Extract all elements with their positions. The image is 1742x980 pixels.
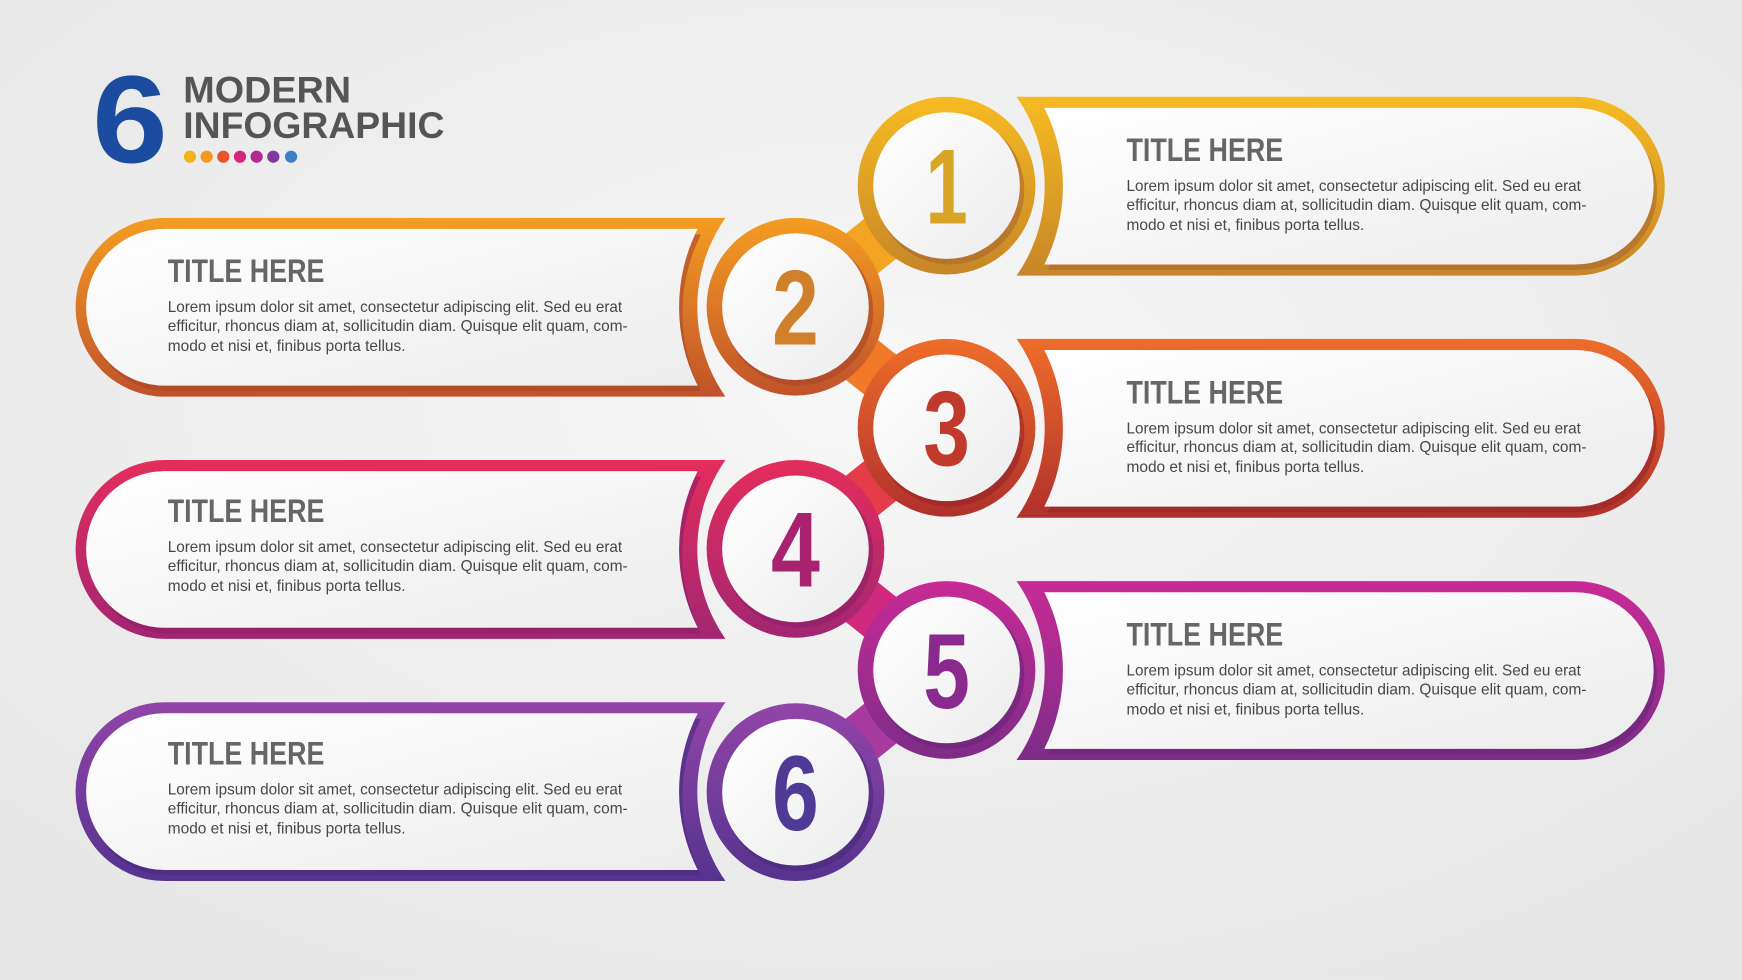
body 6 — [168, 781, 628, 837]
body 5 — [1127, 663, 1586, 718]
body 2 — [168, 299, 628, 355]
number 4: 4 — [771, 490, 820, 610]
body 5: efficitur, rhoncus diam at, sollicitudin diam. Quisque elit quam, com- — [1127, 681, 1586, 698]
panel: step 3 — [858, 339, 1665, 518]
big number 6: 6 — [92, 50, 168, 189]
number 5: 5 — [923, 611, 970, 731]
number 3: 3 — [923, 369, 970, 489]
title 4: TITLE HERE — [168, 493, 324, 529]
body 6: Lorem ipsum dolor sit amet, consectetur adipiscing elit. Sed eu erat — [168, 781, 623, 798]
body 4: modo et nisi et, finibus porta tellus. — [168, 578, 406, 595]
body 1: Lorem ipsum dolor sit amet, consectetur adipiscing elit. Sed eu erat — [1127, 178, 1582, 195]
body 5: modo et nisi et, finibus porta tellus. — [1127, 701, 1364, 718]
header — [92, 50, 444, 189]
body 4 — [168, 539, 628, 595]
header: INFOGRAPHIC — [183, 105, 444, 146]
body 1: modo et nisi et, finibus porta tellus. — [1127, 217, 1364, 234]
body 4: efficitur, rhoncus diam at, sollicitudin diam. Quisque elit quam, com- — [168, 558, 628, 575]
number 6: 6 — [772, 733, 819, 853]
body 4: Lorem ipsum dolor sit amet, consectetur adipiscing elit. Sed eu erat — [168, 539, 623, 556]
title 6: TITLE HERE — [168, 735, 324, 771]
color dots — [184, 151, 297, 163]
header title: MODERN — [183, 69, 351, 110]
title 2: TITLE HERE — [168, 253, 324, 289]
title 1: TITLE HERE — [1127, 132, 1283, 168]
body 3: efficitur, rhoncus diam at, sollicitudin diam. Quisque elit quam, com- — [1127, 439, 1586, 456]
body 2: modo et nisi et, finibus porta tellus. — [168, 338, 406, 355]
body 5: Lorem ipsum dolor sit amet, consectetur adipiscing elit. Sed eu erat — [1127, 663, 1582, 680]
number 2: 2 — [772, 247, 819, 367]
body 3: Lorem ipsum dolor sit amet, consectetur adipiscing elit. Sed eu erat — [1127, 420, 1582, 437]
title 3: TITLE HERE — [1127, 374, 1283, 410]
number 1: 1 — [925, 126, 968, 246]
body 3: modo et nisi et, finibus porta tellus. — [1127, 459, 1364, 476]
body 2: Lorem ipsum dolor sit amet, consectetur adipiscing elit. Sed eu erat — [168, 299, 623, 316]
body 6: efficitur, rhoncus diam at, sollicitudin diam. Quisque elit quam, com- — [168, 800, 628, 817]
panel: step 2 — [76, 218, 884, 397]
connectors between circles — [795, 186, 947, 792]
title 5: TITLE HERE — [1127, 617, 1283, 653]
body 3 — [1127, 420, 1586, 476]
body 2: efficitur, rhoncus diam at, sollicitudin diam. Quisque elit quam, com- — [168, 318, 628, 335]
body 1 — [1127, 178, 1586, 234]
body 1: efficitur, rhoncus diam at, sollicitudin diam. Quisque elit quam, com- — [1127, 197, 1586, 214]
body 6: modo et nisi et, finibus porta tellus. — [168, 820, 406, 837]
panel: step 6 — [76, 702, 884, 881]
panel: step 5 — [858, 581, 1665, 760]
panel: step 4 — [76, 460, 884, 639]
panel: step 1 — [858, 97, 1665, 276]
